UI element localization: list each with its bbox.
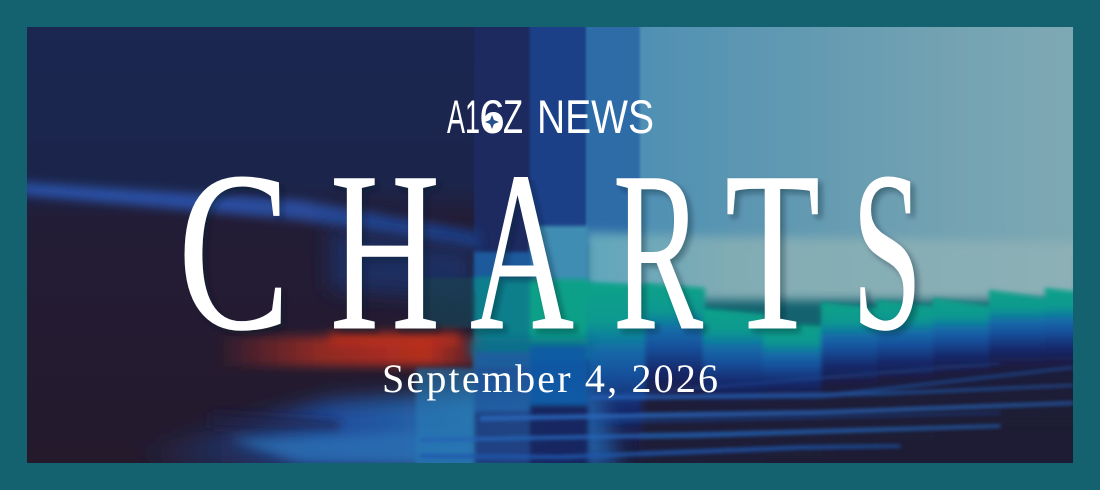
title CHARTS: C xyxy=(178,126,290,378)
logo wordmark A16Z: A1 xyxy=(447,90,480,143)
brand logo xyxy=(447,90,654,143)
logo wordmark A16Z: Z xyxy=(503,90,523,143)
stepped colour columns xyxy=(474,277,1080,470)
logo wordmark NEWS: NEWS xyxy=(537,90,654,143)
red streak xyxy=(215,332,480,366)
title CHARTS: H xyxy=(330,126,440,378)
dark base under the right columns xyxy=(586,361,1073,463)
blue streak xyxy=(20,183,480,250)
title CHARTS: T xyxy=(725,126,820,378)
title CHARTS: A xyxy=(470,126,574,378)
title CHARTS: R xyxy=(613,126,703,378)
lower blue glow xyxy=(130,385,620,470)
logo wordmark A16Z: 6 xyxy=(479,90,505,143)
title CHARTS: S xyxy=(852,126,922,378)
dark horizontal bands and blue light lines xyxy=(420,362,1080,470)
pale band xyxy=(586,232,1080,300)
title CHARTS xyxy=(178,126,922,378)
date: September 4, 2026 xyxy=(382,356,718,401)
